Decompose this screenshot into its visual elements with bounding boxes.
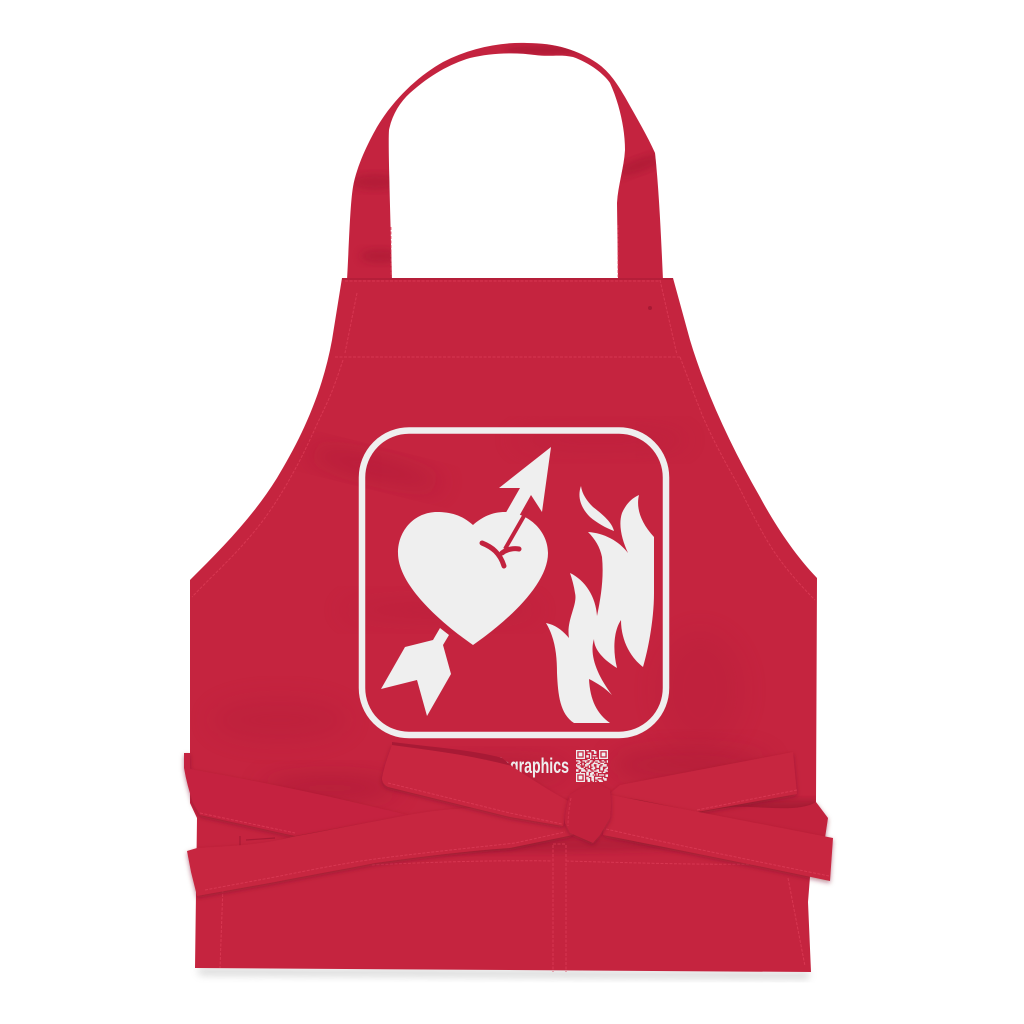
tie: lower left stitch	[205, 832, 565, 890]
neck strap	[347, 43, 665, 280]
stitching	[192, 225, 815, 972]
printed badge	[362, 430, 666, 735]
icon: arrow head and shaft	[496, 447, 551, 550]
QR code	[576, 750, 608, 782]
icon: arrow tail	[381, 628, 451, 716]
tie: left band stitch	[200, 813, 295, 833]
tie: left back band	[184, 753, 408, 836]
tie: upper left loop	[382, 745, 570, 826]
icon: flames	[546, 495, 654, 723]
tie: lower right band	[603, 794, 833, 881]
bow knot	[565, 783, 611, 843]
fabric folds	[210, 278, 820, 852]
icon: arrow entry cuts	[482, 509, 528, 566]
icon: flame ember	[579, 486, 614, 531]
buttonhole mark	[648, 306, 652, 310]
apron body	[190, 225, 820, 972]
tie: right upper loop	[608, 752, 797, 812]
bow knot stitch	[568, 798, 571, 826]
pocket mark	[240, 836, 275, 846]
badge rounded frame	[362, 430, 666, 735]
icon: heart	[398, 512, 548, 645]
tie: lower left band	[187, 800, 573, 896]
tie: right loop stitch	[697, 790, 797, 810]
tie: lower right stitch	[606, 829, 829, 876]
tie: upper loop stitch	[388, 783, 562, 824]
tie: upper loop inner fold	[392, 742, 512, 766]
tie: right back band	[700, 802, 828, 838]
waist ties and bow	[184, 742, 833, 896]
apron product illustration	[180, 42, 836, 982]
apron soft ground shadow	[197, 968, 810, 979]
brand text: Infographics	[484, 755, 569, 778]
